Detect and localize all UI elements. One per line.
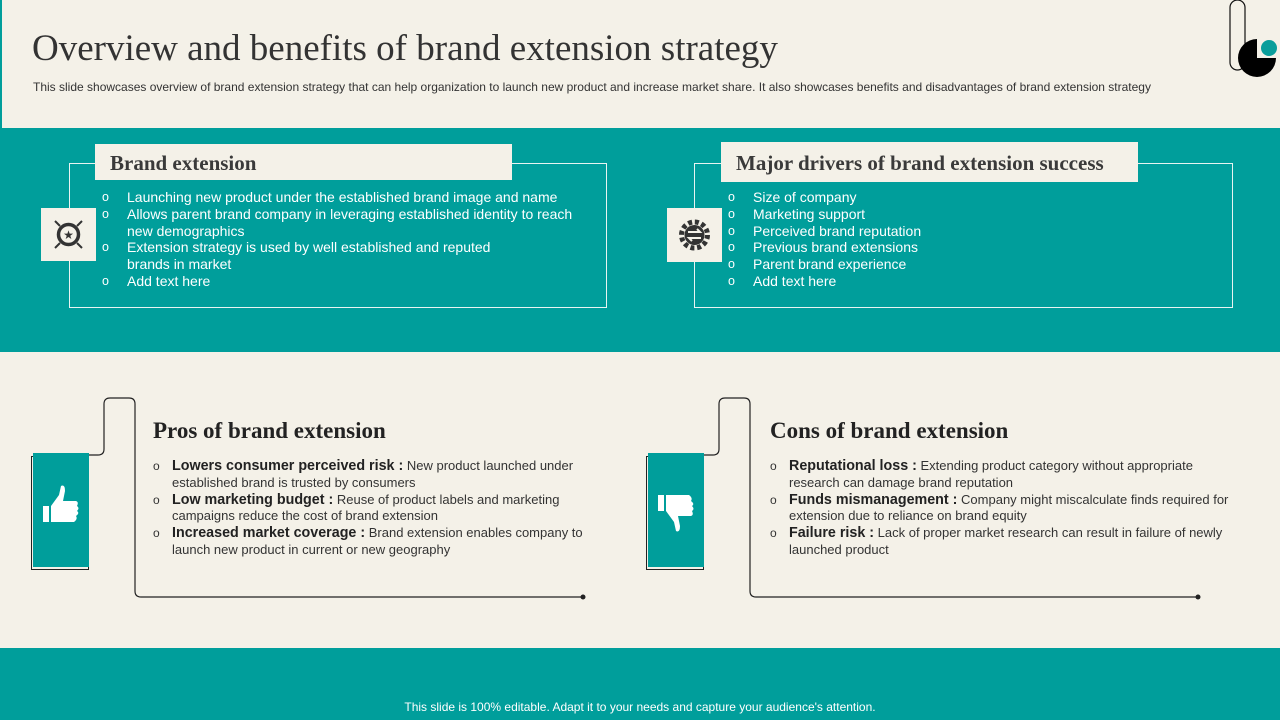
panel: brand extension: Add text here — [127, 273, 210, 289]
heading: major drivers — [721, 142, 1138, 182]
icon: brand star expand: ★ — [63, 228, 74, 242]
panel: brand extension: Extension strategy is used by well established and reputed — [127, 239, 490, 255]
footer band — [0, 648, 1280, 720]
panel: brand extension — [69, 163, 607, 308]
list: cons: Failure risk : Lack of proper market research can result in failure of newly launched product — [789, 525, 1222, 557]
panel: major drivers: Marketing support — [753, 206, 865, 222]
heading: brand extension — [95, 144, 512, 180]
list: pros — [154, 458, 583, 557]
subtitle: This slide showcases overview of brand extension strategy that can help organization to launch new product and increase market share. It also showcases benefits and disadvantages of brand extension strategy — [33, 80, 1151, 94]
connector line — [704, 397, 1200, 600]
decoration: top right — [1229, 0, 1277, 77]
panel: major drivers: Perceived brand reputation — [753, 223, 921, 239]
icon box: thumbs up — [31, 456, 89, 570]
list: cons — [770, 458, 1228, 557]
pros section — [31, 397, 586, 600]
icon: brand star expand — [41, 208, 96, 261]
icon: gear people — [667, 208, 722, 262]
panel: brand extension: Launching new product under the established brand image and name — [127, 189, 557, 205]
heading: cons: Cons of brand extension — [770, 418, 1008, 443]
title: Overview and benefits of brand extension strategy — [32, 28, 778, 69]
heading: major drivers: Major drivers of brand extension success — [736, 151, 1104, 175]
panel: major drivers: Parent brand experience — [753, 256, 906, 272]
heading: pros: Pros of brand extension — [153, 418, 386, 443]
list: cons: Reputational loss : Extending product category without appropriate research can damage brand reputation — [789, 458, 1193, 490]
list: pros: Low marketing budget : Reuse of product labels and marketing campaigns reduce the cost of brand extension — [172, 492, 559, 523]
list: pros: Lowers consumer perceived risk : New product launched under established brand is trusted by consumers — [172, 458, 573, 490]
footer text: This slide is 100% editable. Adapt it to your needs and capture your audience's attention. — [404, 700, 876, 714]
panel: brand extension: brands in market — [127, 256, 231, 272]
panel: major drivers: Size of company — [753, 189, 856, 205]
panel: major drivers: Add text here — [753, 273, 836, 289]
teal band — [0, 128, 1280, 352]
icon box: thumbs down — [646, 456, 704, 570]
panel: brand extension: Allows parent brand company in leveraging established identity to reach new demographics — [127, 206, 572, 239]
heading: brand extension: Brand extension — [110, 151, 256, 175]
left edge line — [0, 0, 2, 128]
list: cons: Funds mismanagement : Company might miscalculate finds required for extension due to reliance on brand equity — [789, 492, 1228, 523]
list: pros: Increased market coverage : Brand extension enables company to launch new product in current or new geography — [172, 525, 583, 557]
panel: major drivers — [694, 163, 1233, 308]
connector line — [89, 397, 586, 600]
cons section — [646, 397, 1228, 600]
panel: major drivers: Previous brand extensions — [753, 239, 918, 255]
